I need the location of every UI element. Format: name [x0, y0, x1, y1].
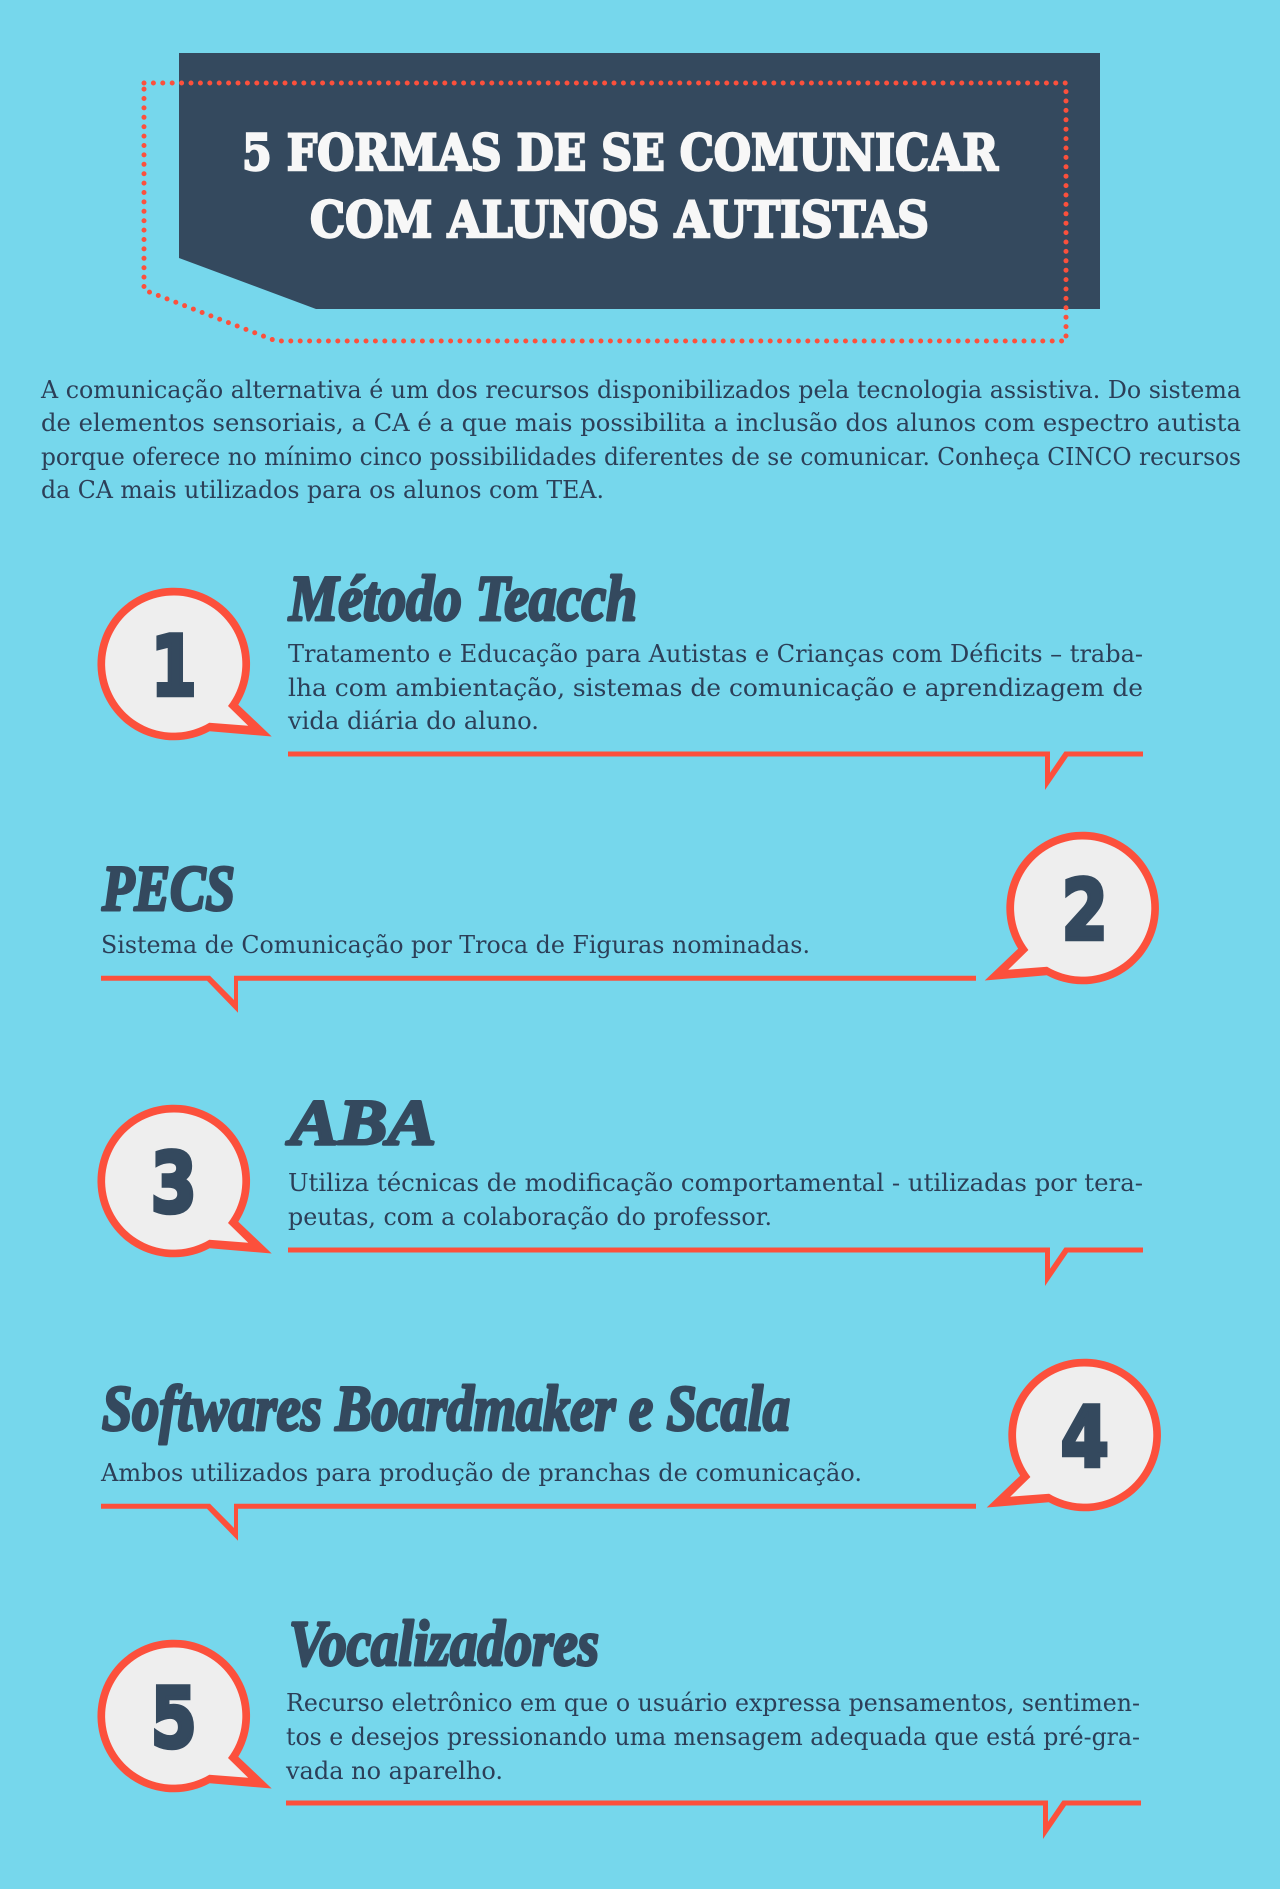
item 2: PECS	[101, 832, 1159, 1013]
item 4: Softwares Boardmaker e Scala	[100, 1359, 1161, 1541]
text 5: vada no aparelho.	[285, 1756, 503, 1785]
line 3	[288, 1248, 1143, 1286]
title	[242, 123, 998, 249]
heading 5: Vocalizadores	[289, 1608, 599, 1680]
title banner	[144, 53, 1100, 341]
line 1	[288, 752, 1143, 790]
line 4	[101, 1504, 976, 1541]
number bubble 1: 1	[151, 618, 197, 715]
heading 1: Método Teacch	[288, 563, 637, 635]
number bubble 2: 2	[1062, 862, 1108, 959]
number bubble 5: 5	[151, 1670, 197, 1767]
line 5	[286, 1800, 1141, 1839]
number bubble 5	[97, 1640, 272, 1792]
title: 5 FORMAS DE SE COMUNICAR	[242, 123, 998, 182]
text 3: Utiliza técnicas de modificação comportamental - utilizadas por tera-	[288, 1168, 1143, 1197]
text 1: lha com ambientação, sistemas de comunicação e aprendizagem de	[288, 673, 1143, 702]
intro text	[40, 375, 1241, 504]
heading 3: ABA	[286, 1087, 436, 1159]
intro text: de elementos sensoriais, a CA é a que mais possibilita a inclusão dos alunos com espectro autista	[41, 408, 1241, 437]
text 5	[285, 1688, 1140, 1785]
heading 2: PECS	[101, 853, 235, 925]
line 2	[101, 976, 976, 1013]
text 3: peutas, com a colaboração do professor.	[288, 1202, 772, 1231]
item 5: Vocalizadores	[97, 1608, 1141, 1839]
heading 4: Softwares Boardmaker e Scala	[102, 1373, 790, 1445]
text 2: Sistema de Comunicação por Troca de Figuras nominadas.	[101, 930, 810, 959]
title: COM ALUNOS AUTISTAS	[310, 190, 929, 249]
intro text: A comunicação alternativa é um dos recursos disponibilizados pela tecnologia assistiva. Do sistema	[40, 375, 1241, 404]
item 3: ABA	[97, 1087, 1143, 1286]
number bubble 4	[987, 1359, 1161, 1511]
text 5: Recurso eletrônico em que o usuário expressa pensamentos, sentimen-	[286, 1688, 1140, 1717]
number bubble 3	[97, 1105, 272, 1257]
text 4: Ambos utilizados para produção de pranchas de comunicação.	[100, 1458, 862, 1487]
text 5: tos e desejos pressionando uma mensagem adequada que está pré-gra-	[286, 1722, 1140, 1751]
text 1: vida diária do aluno.	[287, 706, 539, 735]
text 1	[287, 639, 1143, 735]
number bubble 1	[97, 588, 272, 740]
text 3	[288, 1168, 1143, 1231]
intro text: da CA mais utilizados para os alunos com TEA.	[41, 475, 604, 504]
number bubble 3: 3	[151, 1135, 197, 1232]
number bubble 2	[985, 832, 1159, 984]
text 1: Tratamento e Educação para Autistas e Crianças com Déficits – traba-	[288, 639, 1143, 668]
number bubble 4: 4	[1061, 1389, 1109, 1486]
item 1: Método Teacch	[97, 563, 1143, 790]
intro text: porque oferece no mínimo cinco possibilidades diferentes de se comunicar. Conheça CINCO recursos	[41, 442, 1241, 471]
